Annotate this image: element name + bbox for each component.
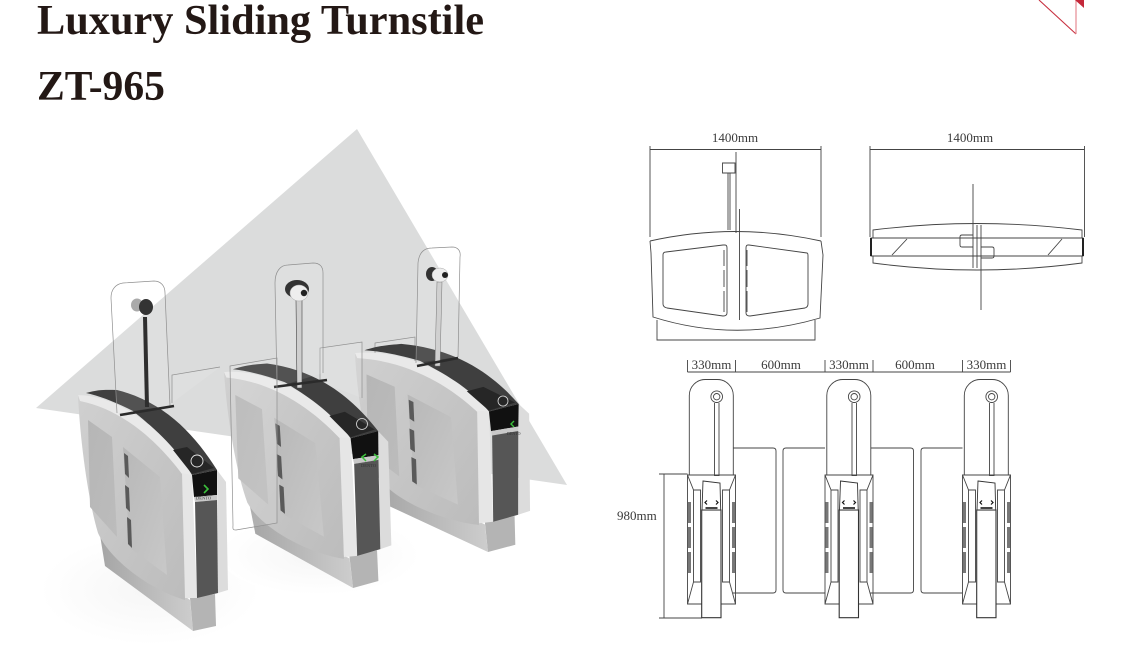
body: [78, 390, 228, 631]
touch button: [191, 455, 203, 467]
top dimensions: 330mm: [967, 357, 1006, 372]
cameras: [960, 235, 994, 258]
window slots: [724, 250, 747, 312]
height dimension: 980mm: [617, 474, 702, 618]
top dimensions: 330mm: [829, 357, 869, 372]
bottom elevation drawing: [617, 357, 1010, 618]
top dimensions: 330mm: [692, 357, 731, 372]
product render: three turnstiles: [78, 247, 533, 631]
front elevation drawing: [650, 130, 823, 340]
cross bar: [417, 358, 458, 366]
top dimensions: [688, 357, 1010, 372]
left window: [663, 245, 727, 316]
dimension: 1400mm: [650, 130, 821, 237]
ground shadows: [40, 515, 420, 645]
touch button: [356, 418, 368, 430]
body outline: [650, 232, 821, 241]
dimension: 1400mm: 1400mm: [947, 130, 993, 145]
band chamfers: [892, 239, 1062, 255]
camera pole and glass: [722, 152, 740, 320]
top dimensions: 600mm: [895, 357, 935, 372]
front sliding gate: [230, 358, 277, 530]
camera pole: [143, 317, 149, 407]
turnstile 2: [224, 263, 392, 599]
wing lines: [973, 184, 981, 310]
body lower outline: [650, 241, 823, 340]
display and arrow: DENTO: [507, 431, 521, 436]
background grey triangle: [36, 129, 567, 485]
body outline: [873, 224, 1082, 270]
sliding gates: [733, 448, 962, 593]
camera: [426, 267, 448, 282]
touch button: [498, 396, 508, 406]
display and arrow: DENTO: [196, 496, 212, 500]
rear sliding gate: [172, 367, 220, 403]
display and arrow: [196, 485, 212, 500]
glass wing: [111, 281, 170, 413]
height dimension: 980mm: 980mm: [617, 508, 657, 523]
dimension: 1400mm: [870, 130, 1084, 237]
body: [352, 330, 533, 566]
corner ornament: red flag: [1039, 0, 1084, 34]
top dimensions: 600mm: [761, 357, 801, 372]
cross bar: [120, 406, 174, 415]
body: [224, 353, 392, 599]
camera: [285, 280, 309, 301]
turnstile 3: [352, 247, 533, 566]
display and arrow: [507, 421, 521, 436]
unit 3: [962, 380, 1010, 618]
glass wing: [275, 263, 323, 387]
centre band: [871, 238, 1083, 256]
display and arrows: [361, 454, 378, 468]
camera pole: [296, 300, 302, 388]
unit 2: [825, 380, 873, 618]
right window: [746, 245, 808, 316]
dimension: 1400mm: 1400mm: [712, 130, 758, 145]
camera pole: [435, 282, 442, 366]
model number: ZT-965: ZT-965: [37, 64, 165, 110]
display and arrows: DENTO: [361, 463, 377, 468]
turnstile 1: [78, 281, 228, 631]
camera: [131, 298, 153, 315]
unit 1: [688, 380, 736, 618]
rear sliding gate: [320, 342, 362, 398]
glass wing: [416, 247, 460, 363]
cross bar: [274, 380, 327, 387]
rear sliding gate: [375, 337, 415, 498]
top view drawing: [870, 130, 1084, 310]
